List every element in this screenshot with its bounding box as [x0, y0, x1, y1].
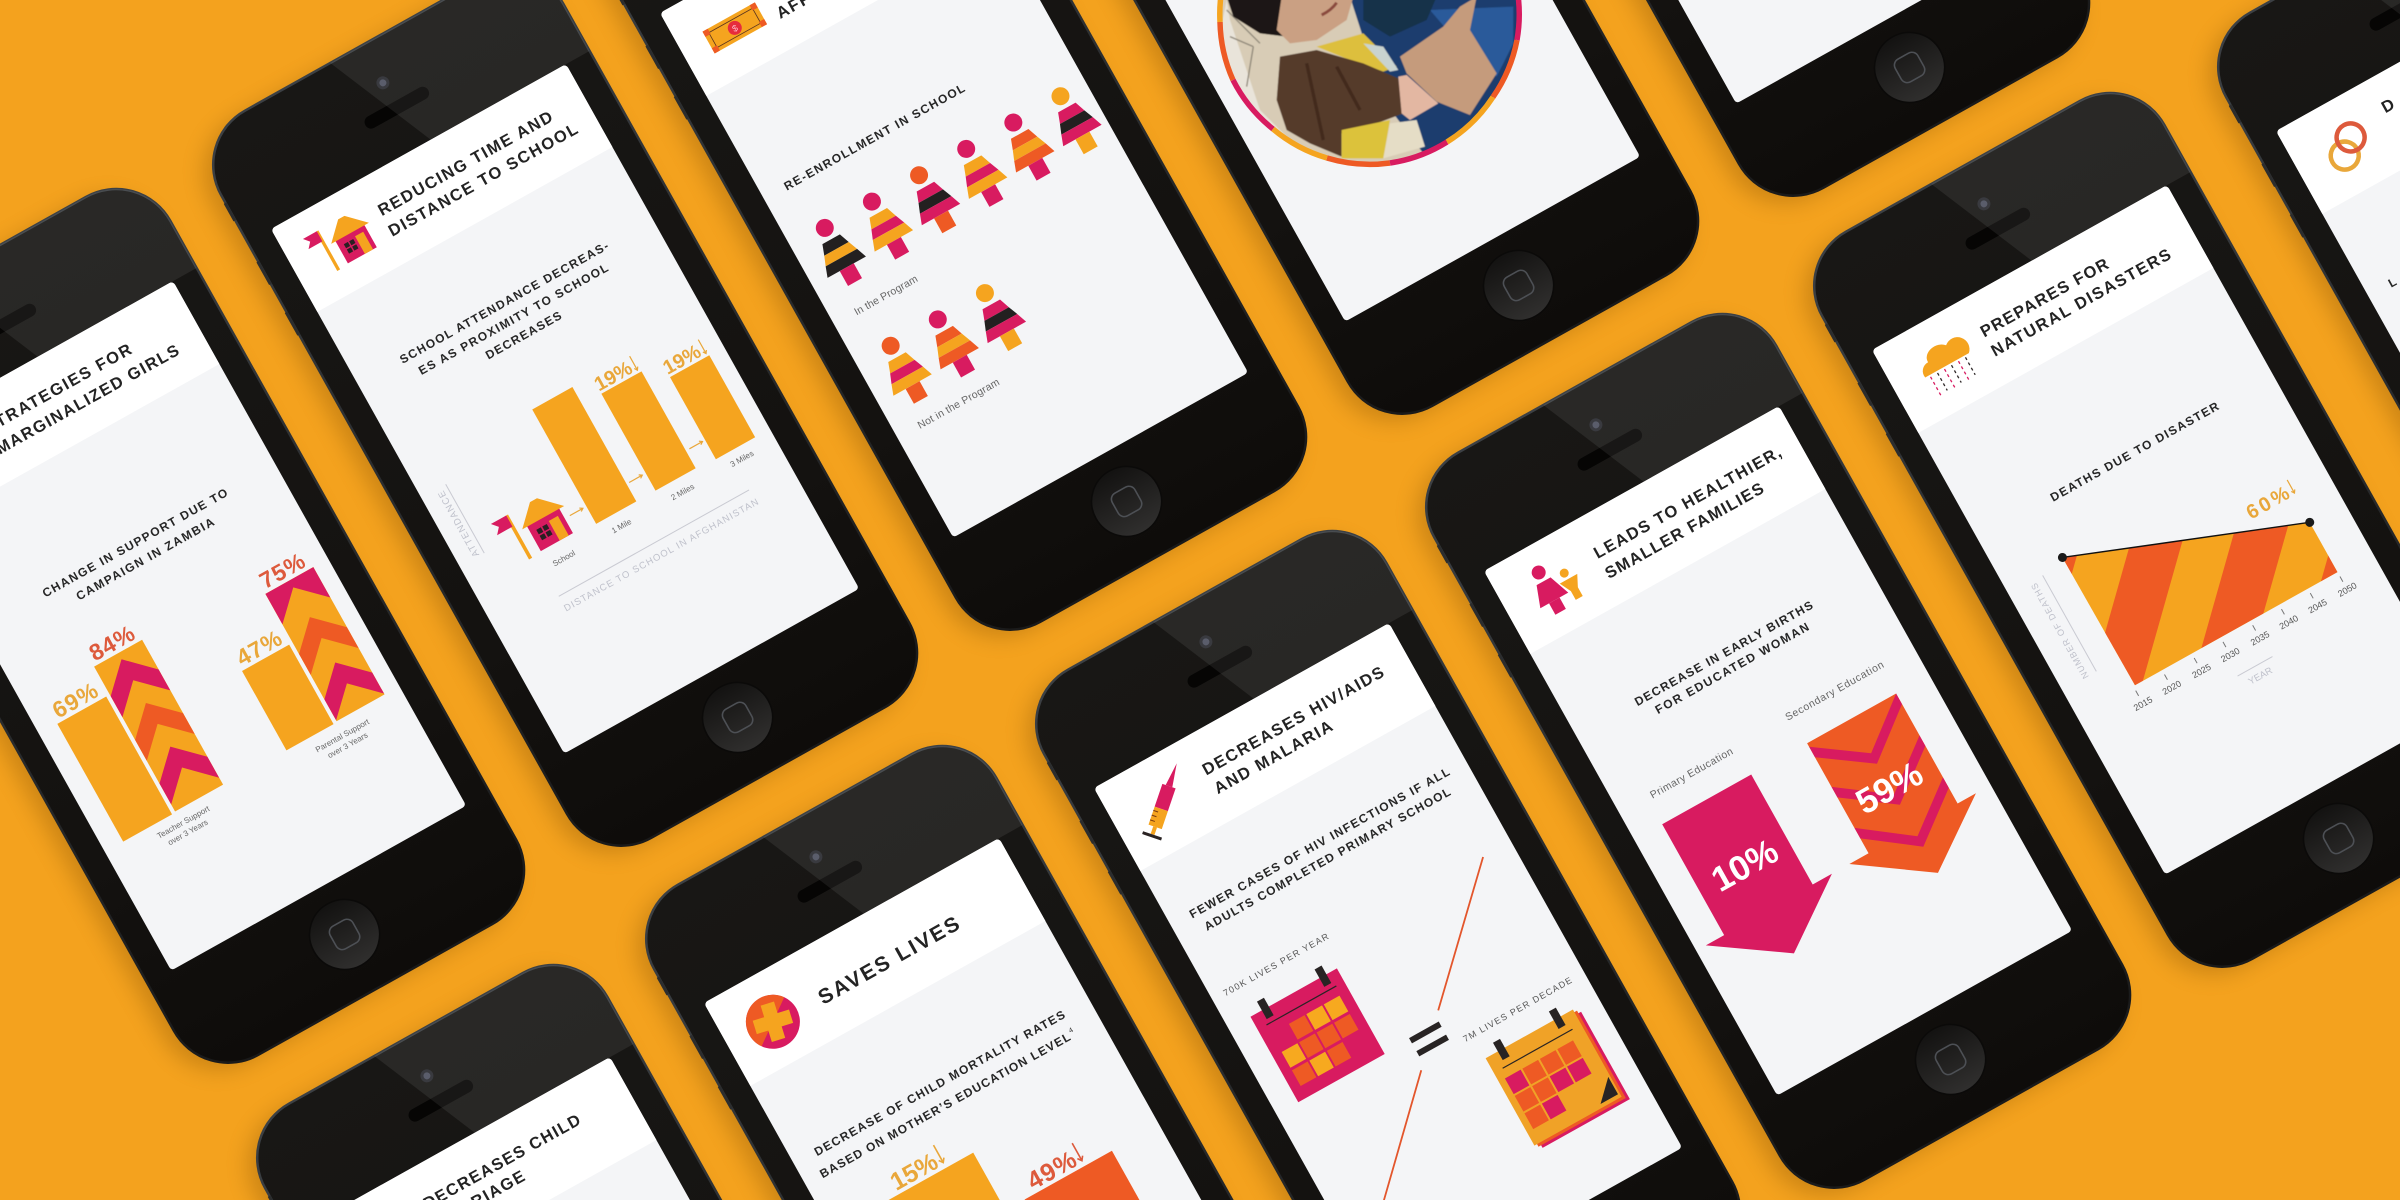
chart heading: CAMPAIGN IN ZAMBIA [74, 515, 217, 603]
phone: decreases HIV/AIDS and malaria [1001, 504, 1765, 1200]
icon: money bill: $ [730, 23, 740, 34]
area chart: deaths due to disaster: 2035 [2249, 629, 2271, 648]
calendar: 700K lives per year: 700K LIVES PER YEAR [1221, 931, 1331, 998]
chart heading: DECREASE OF CHILD MORTALITY RATES [812, 1008, 1067, 1159]
phone: cropped right [2183, 0, 2400, 778]
icon: woman and child [1521, 550, 1589, 620]
phone frame [611, 719, 1375, 1200]
icon: rain cloud [1914, 331, 1984, 399]
arrow: secondary education 59%: 59% [1849, 754, 1930, 822]
bar chart: parental support: Parental Support [314, 717, 371, 754]
axis: year [2238, 657, 2281, 691]
title: DECREASES HIV/AIDS [1199, 663, 1387, 779]
equals sign [1409, 1021, 1449, 1056]
area chart: deaths due to disaster: 2030 [2219, 646, 2241, 664]
title: LEADS TO HEALTHIER, [1591, 443, 1785, 563]
title: PREPARES FOR [1977, 255, 2112, 341]
bar chart: teacher support: 84% [85, 620, 139, 666]
phone frame [0, 162, 549, 1093]
title: SMALLER FAMILIES [1602, 480, 1767, 583]
pictogram: not in the program: Not in the Program [916, 376, 1002, 432]
calendar: 700K lives per year [1221, 931, 1392, 1108]
icon: school on chart [491, 489, 579, 567]
bar chart: attendance by distance: 19% [659, 341, 705, 379]
axis: distance: DISTANCE TO SCHOOL IN AFGHANISTAN [562, 497, 761, 614]
arrow: primary education 10%: 10% [1705, 832, 1785, 900]
bar chart: attendance by distance: 1 Mile [610, 517, 634, 535]
chart heading: ES AS PROXIMITY TO SCHOOL [416, 261, 611, 378]
phone frame [1001, 504, 1765, 1200]
bar chart: teacher support [53, 626, 223, 845]
pictogram: in the program: In the Program [852, 273, 920, 318]
phone: saves lives [611, 719, 1375, 1200]
chart heading: CHANGE IN SUPPORT DUE TO [40, 486, 230, 600]
arrow: primary education 10% [1626, 732, 1857, 989]
chart heading: 4 [1068, 1027, 1075, 1035]
arrow: primary education 10%: Primary Education [1648, 745, 1735, 801]
title fragment: D [2378, 95, 2398, 117]
phone frame [1391, 287, 2155, 1200]
bar chart: attendance by distance: School [551, 548, 577, 568]
title: SAVES LIVES [814, 912, 964, 1009]
area chart: deaths due to disaster: 2015 [2132, 694, 2154, 713]
bar chart: child mortality [874, 1070, 1209, 1200]
title: DISTANCE TO SCHOOL [385, 120, 581, 240]
phone frame [567, 0, 1331, 660]
phone frame [959, 0, 1723, 444]
phone frame [1779, 66, 2400, 997]
phone frame [2183, 0, 2400, 778]
chart heading: DECREASES [483, 309, 564, 362]
chart heading: DEATHS DUE TO DISASTER [2048, 399, 2222, 505]
axis: attendance: ATTENDANCE [436, 489, 482, 559]
axis: year: YEAR [2247, 665, 2275, 687]
phone: decreases child marriage [222, 938, 986, 1200]
area chart: deaths due to disaster [2058, 480, 2356, 711]
title: NATURAL DISASTERS [1988, 246, 2174, 360]
pictogram: not in the program [867, 274, 1048, 435]
bar chart: attendance by distance: 3 Miles [729, 449, 755, 469]
area chart: deaths due to disaster: 2045 [2306, 597, 2329, 615]
icon: money bill [702, 2, 767, 53]
phone: photo screen [959, 0, 1723, 444]
title: REDUCING TIME AND [375, 108, 556, 220]
chart heading: RE-ENROLLMENT IN SCHOOL [781, 81, 967, 193]
chart heading: SCHOOL ATTENDANCE DECREAS- [397, 239, 611, 367]
bar chart: parental support [239, 554, 384, 758]
phone: reducing time and distance to school [178, 0, 942, 876]
bar chart: child mortality: 15% [885, 1148, 943, 1196]
bar chart: teacher support: over 3 Years [166, 818, 210, 847]
photo: adult hugging child in a circle [1213, 0, 1530, 170]
phone: prepares for natural disasters [1797, 92, 2400, 982]
pictogram: in the program [801, 78, 1126, 322]
phone frame [178, 0, 942, 876]
phone: leads to healthier, smaller families [1391, 287, 2155, 1200]
icon: two rings [2319, 118, 2376, 175]
title: AND MALARIA [1211, 717, 1336, 798]
bar chart: parental support: 75% [255, 548, 309, 594]
chart heading: ADULTS COMPLETED PRIMARY SCHOOL [1202, 785, 1453, 934]
phone frame [222, 938, 986, 1200]
bar chart: parental support: over 3 Years [326, 731, 369, 760]
bar chart: attendance by distance: 19% [591, 357, 637, 396]
arrow: secondary education 59% [1786, 662, 1976, 873]
bar chart: attendance by distance [482, 321, 763, 568]
axis: number of deaths: NUMBER OF DEATHS [2029, 581, 2091, 681]
area chart: deaths due to disaster: 2025 [2190, 662, 2213, 680]
chart heading: DECREASE IN EARLY BIRTHS [1632, 598, 1815, 709]
bar chart: attendance by distance: 2 Miles [669, 482, 696, 502]
area chart: deaths due to disaster: 60% [2243, 482, 2294, 524]
phone frame [1350, 0, 2114, 226]
phone: making school affordable [567, 0, 1331, 660]
bar chart: teacher support: Teacher Support [156, 804, 212, 841]
heading fragment: L [2386, 275, 2399, 290]
chart heading: BASED ON MOTHER’S EDUCATION LEVEL [817, 1030, 1073, 1181]
bar chart: parental support: 47% [232, 625, 286, 671]
chart heading: FOR EDUCATED WOMAN [1653, 620, 1811, 717]
diagonal divider [1233, 857, 1621, 1200]
phone: strategies for marginalized girls [0, 162, 549, 1093]
icon: school house and flag [303, 207, 382, 278]
area chart: deaths due to disaster: 2050 [2336, 580, 2358, 599]
area chart: deaths due to disaster: 2040 [2278, 613, 2300, 632]
arrow: secondary education 59%: Secondary Education [1783, 659, 1886, 723]
phone: top cropped screen [1350, 0, 2114, 226]
bar chart: child mortality: 49% [1022, 1146, 1081, 1195]
icon: medical cross [722, 976, 810, 1064]
icon: syringe [1142, 760, 1186, 840]
bar chart: teacher support: 69% [48, 677, 102, 723]
calendar: 7M lives per decade: 7M LIVES PER DECADE [1461, 975, 1574, 1044]
area chart: deaths due to disaster: 2020 [2161, 678, 2183, 697]
chart heading: FEWER CASES OF HIV INFECTIONS IF ALL [1187, 765, 1452, 921]
calendar: 7M lives per decade [1461, 975, 1636, 1156]
